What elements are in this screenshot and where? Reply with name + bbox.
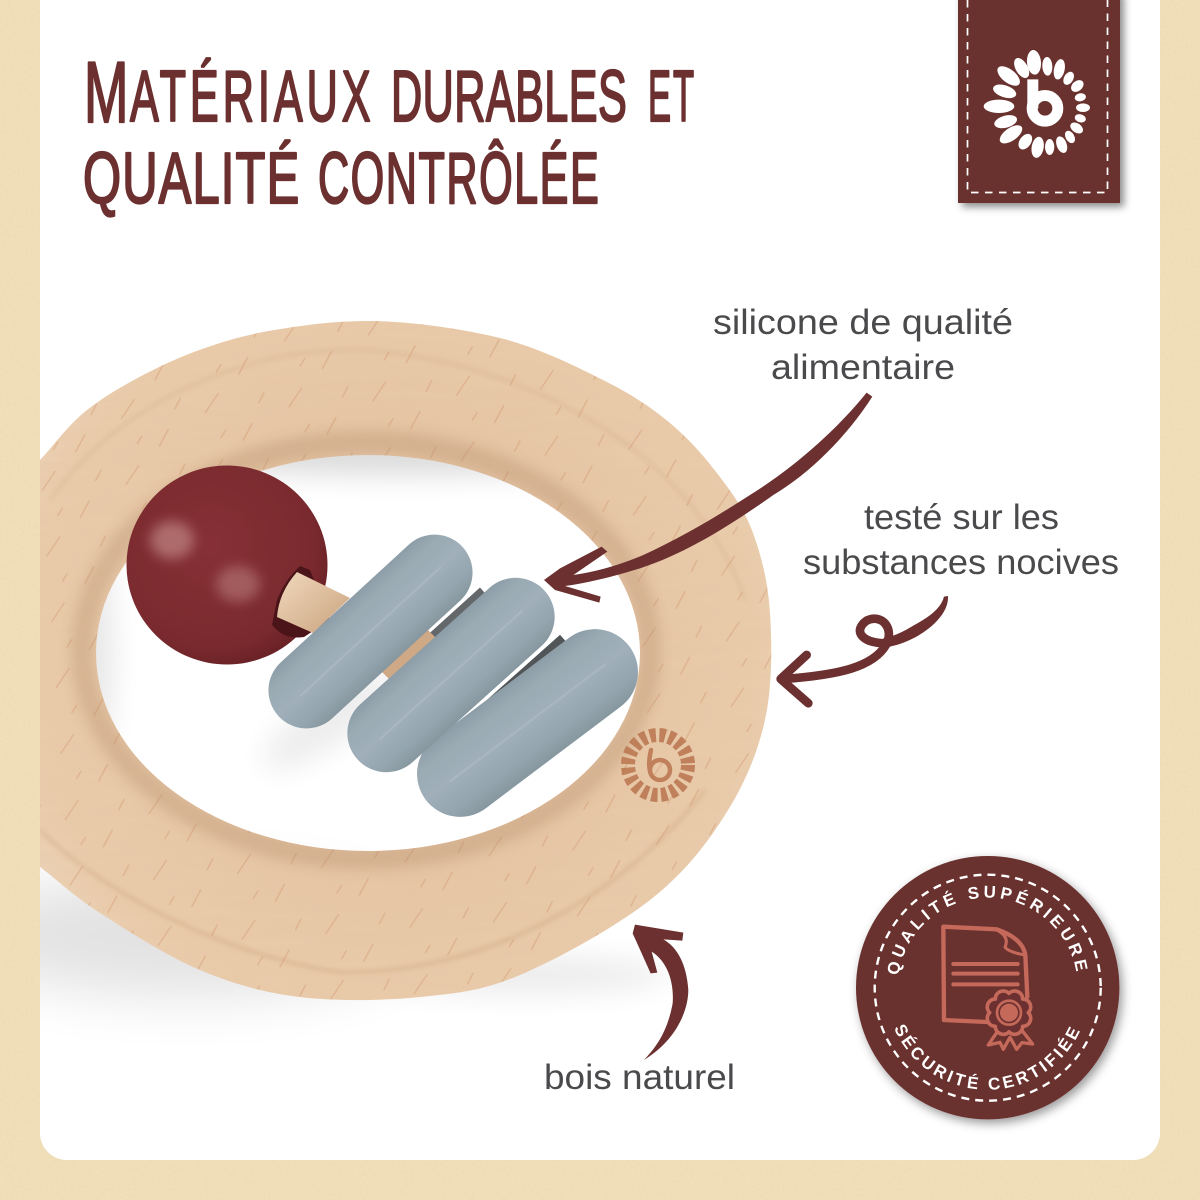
icon: certificate (943, 927, 1033, 1049)
branded burn mark (628, 735, 688, 795)
quality badge (852, 854, 1129, 1130)
red bead (126, 466, 350, 664)
label: silicone: silicone de qualité (713, 303, 1013, 342)
label: silicone (713, 303, 1013, 387)
silicone rings (268, 534, 638, 817)
arrow: natural wood (633, 925, 688, 1060)
silicone ring 1 (268, 534, 472, 728)
silicone ring 2 (347, 578, 555, 772)
silicone ring 3 (417, 629, 638, 817)
title: QUALITÉ (83, 139, 299, 219)
title (83, 45, 694, 219)
label: silicone: alimentaire (771, 348, 955, 387)
label: tested (803, 498, 1119, 582)
product photo: wooden rattle (40, 321, 772, 1010)
badge top text: QUALITÉ SUPÉRIEURE (888, 886, 1088, 974)
ground shadow (0, 873, 670, 997)
title: M (84, 45, 128, 141)
arrow: tested (781, 596, 948, 703)
title: ET (648, 56, 694, 136)
tag stitching (968, 0, 1108, 192)
arrow: silicone (544, 393, 872, 603)
hole shading (66, 415, 680, 786)
wooden ring (40, 321, 772, 1000)
badge bottom text: SÉCURITÉ CERTIFIÉE (895, 1024, 1080, 1090)
dowel (382, 588, 566, 700)
brand tag (958, 0, 1120, 203)
label: natural wood: bois naturel (544, 1058, 735, 1097)
icon: sunflower logo (984, 49, 1090, 159)
label: tested: testé sur les (864, 498, 1059, 537)
badge stitching (875, 875, 1101, 1101)
letter b mark (1027, 79, 1058, 121)
title: CONTRÔLÉE (318, 138, 599, 219)
title: DURABLES (391, 56, 627, 137)
title: ATÉRIAUX (130, 56, 371, 137)
label: tested: substances nocives (803, 543, 1119, 582)
